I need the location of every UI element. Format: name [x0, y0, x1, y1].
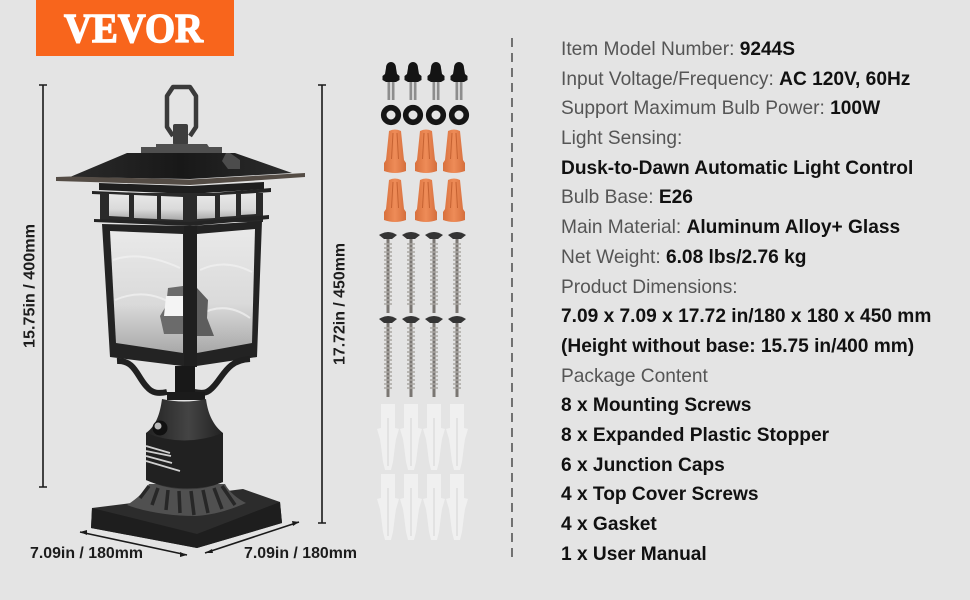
- specifications list: Package Content: [561, 366, 709, 387]
- accessories: mounting screws: [379, 232, 466, 397]
- main frame and glass panes: [102, 221, 262, 367]
- hanging ring: [167, 87, 196, 136]
- specifications list: Main Material: Aluminum Alloy+ Glass: [561, 217, 900, 238]
- specifications list: 6 x Junction Caps: [561, 455, 725, 476]
- specifications list: [561, 39, 931, 565]
- upper window band: [92, 188, 271, 226]
- specifications list: Net Weight: 6.08 lbs/2.76 kg: [561, 247, 806, 268]
- specifications list: 4 x Gasket: [561, 514, 657, 535]
- logo: VEVOR: [36, 0, 234, 56]
- specifications list: Dusk-to-Dawn Automatic Light Control: [561, 158, 913, 179]
- accessories: junction caps: [384, 130, 465, 222]
- mounting base: [91, 399, 282, 548]
- dimension: base width left: [30, 530, 187, 562]
- specifications list: Input Voltage/Frequency: AC 120V, 60Hz: [561, 69, 910, 90]
- specifications list: Support Maximum Bulb Power: 100W: [561, 98, 881, 119]
- dimension: lantern height 400mm: [22, 85, 47, 487]
- roof: [56, 144, 305, 194]
- post lantern product: [56, 87, 305, 548]
- specifications list: 8 x Mounting Screws: [561, 395, 751, 416]
- specifications list: 8 x Expanded Plastic Stopper: [561, 425, 830, 446]
- dimension: total height 450mm: [318, 85, 348, 523]
- dimension: base width right: 7.09in / 180mm: [244, 545, 357, 562]
- dimension: total height 450mm: 17.72in / 450mm: [332, 243, 348, 365]
- specifications list: Product Dimensions:: [561, 277, 738, 298]
- support brackets: [117, 359, 250, 400]
- specifications list: (Height without base: 15.75 in/400 mm): [561, 336, 914, 357]
- accessories: top cover screws: [382, 62, 468, 100]
- dimension: base width right: [205, 521, 357, 562]
- specifications list: Light Sensing:: [561, 128, 682, 149]
- specifications list: 4 x Top Cover Screws: [561, 484, 759, 505]
- logo: VEVOR: VEVOR: [64, 5, 203, 51]
- accessories: expanded plastic stoppers: [377, 404, 468, 540]
- dimension: base width left: 7.09in / 180mm: [30, 545, 143, 562]
- specifications list: Item Model Number: 9244S: [561, 39, 795, 60]
- specifications list: Bulb Base: E26: [561, 187, 693, 208]
- dimension: lantern height 400mm: 15.75in / 400mm: [22, 224, 38, 348]
- specifications list: 7.09 x 7.09 x 17.72 in/180 x 180 x 450 mm: [561, 306, 931, 327]
- specifications list: 1 x User Manual: [561, 544, 707, 565]
- accessories: gaskets: [384, 108, 466, 122]
